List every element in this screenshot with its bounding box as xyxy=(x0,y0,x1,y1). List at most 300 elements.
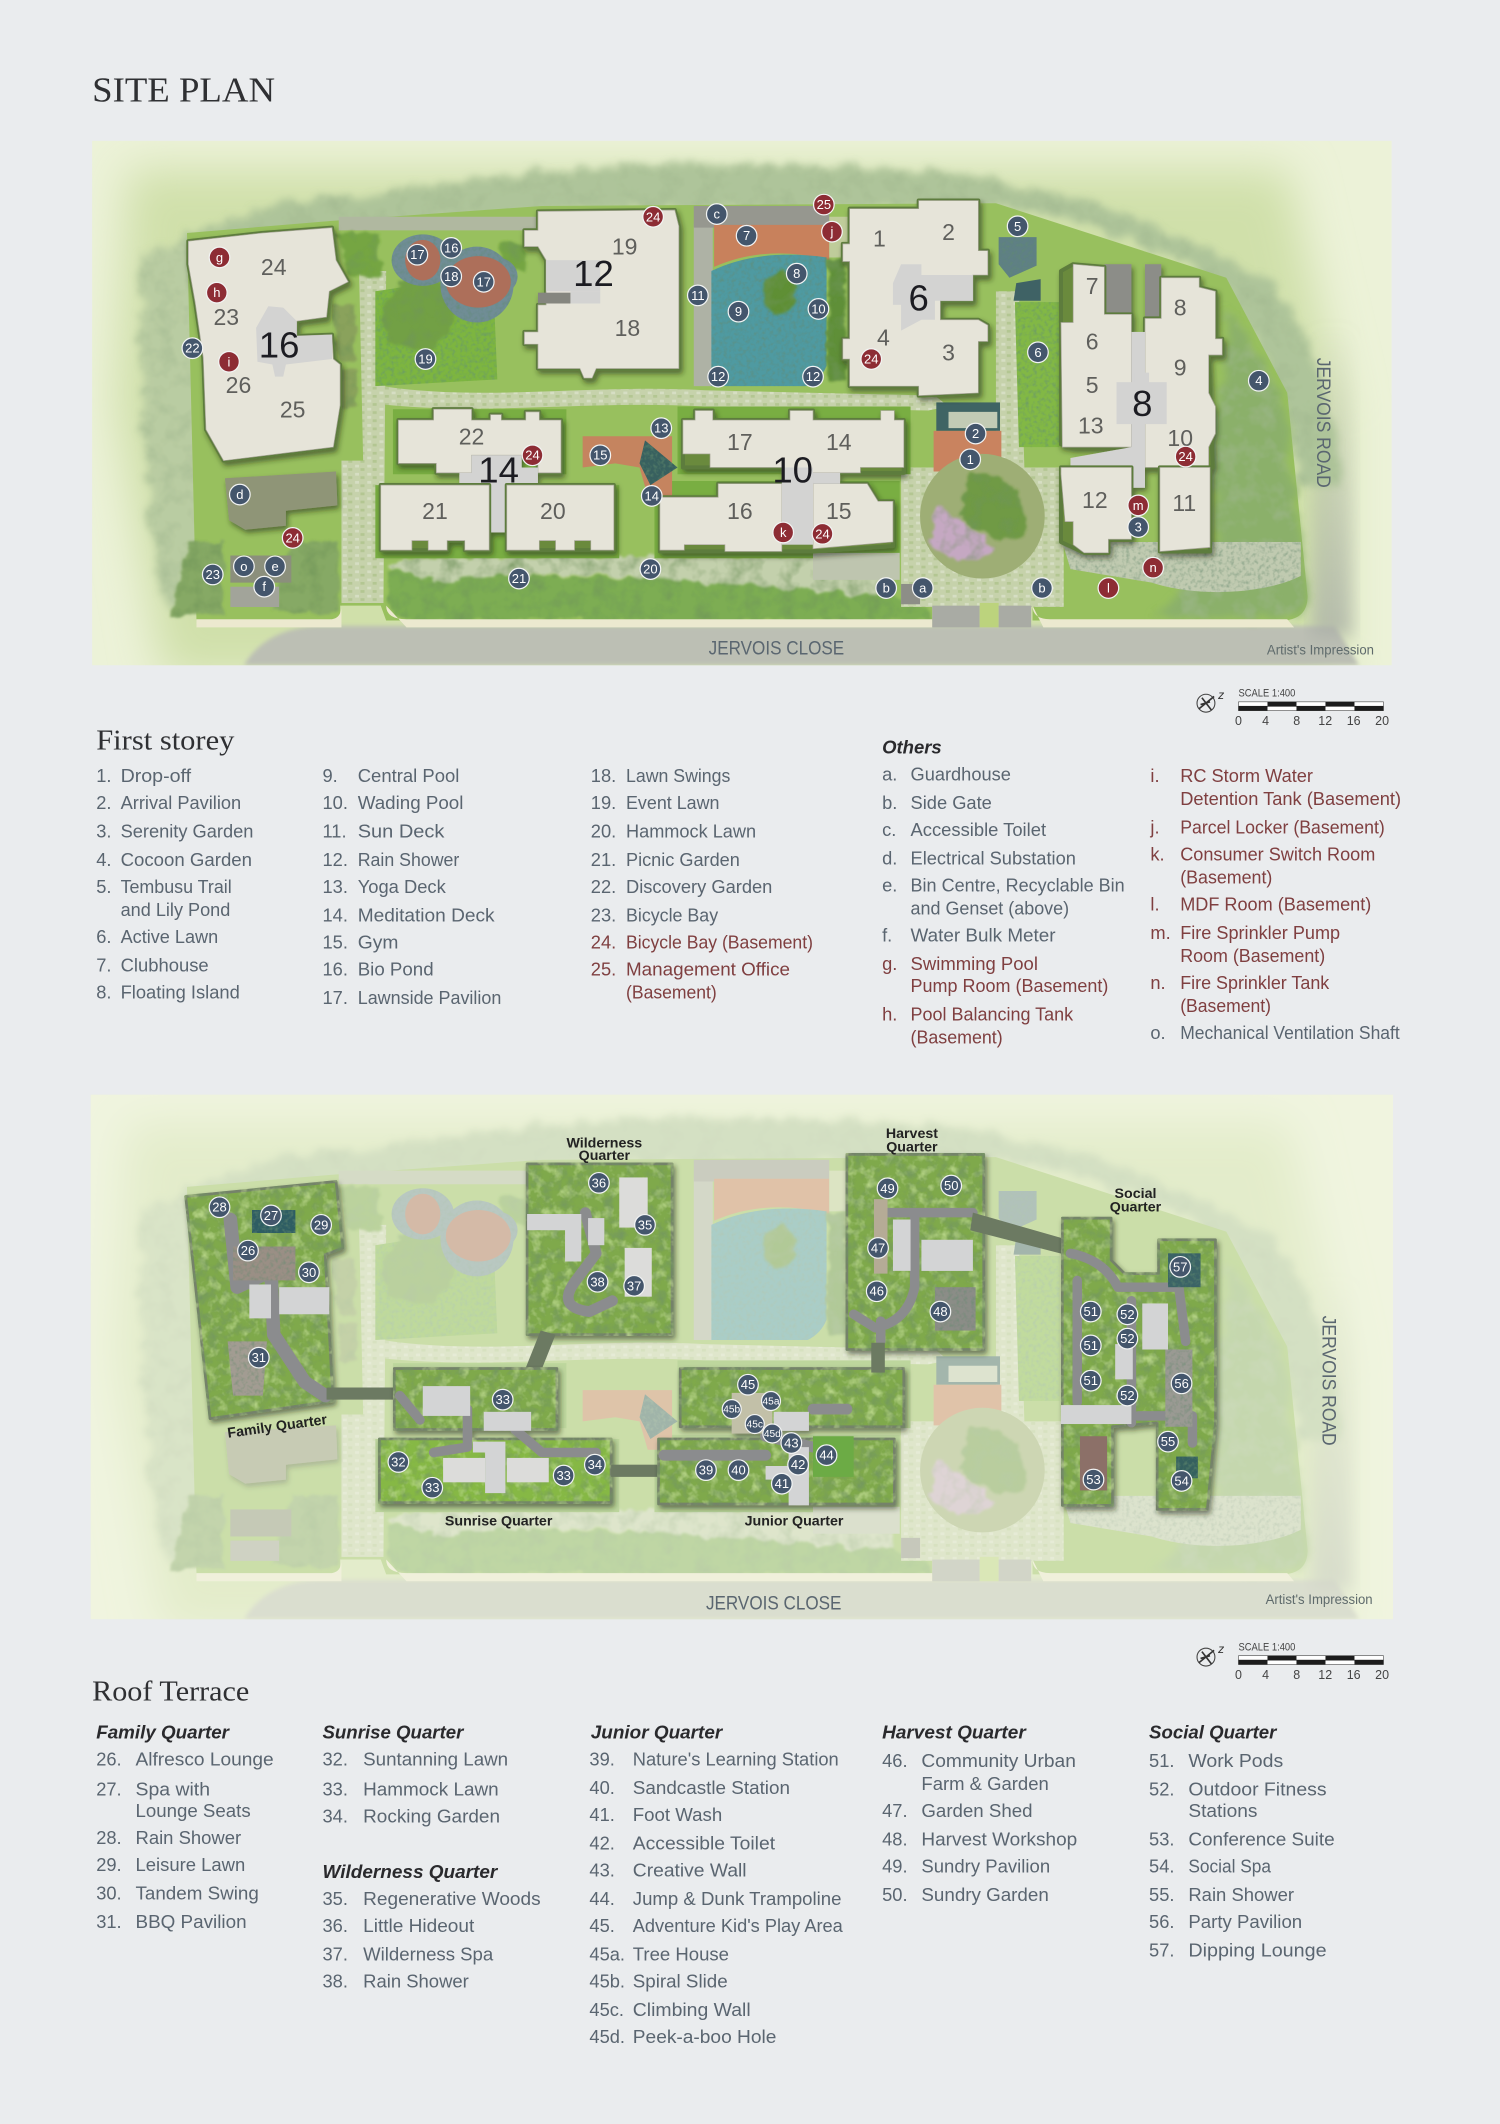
legend column: 9 to 17: 12. xyxy=(322,849,348,870)
roof garden: Junior Quarter xyxy=(659,1368,904,1505)
markers: first storey facilities: i xyxy=(228,354,231,369)
block 8: 5 xyxy=(1086,372,1099,398)
legend column: 18 to 25: 22. xyxy=(591,876,616,897)
legend column: others a to h: and Genset (above) xyxy=(911,898,1069,919)
legend: Harvest Quarter: 47. xyxy=(882,1800,908,1821)
bridge: Sunrise to Junior xyxy=(611,1465,660,1477)
block 8: 12 xyxy=(1082,487,1108,513)
markers: roof terrace facilities: 51 xyxy=(1084,1373,1098,1388)
legend: Harvest Quarter: Farm & Garden xyxy=(921,1773,1049,1794)
quarter name labels: Harvest xyxy=(886,1126,938,1142)
legend: Harvest Quarter: Sundry Pavilion xyxy=(921,1856,1050,1877)
legend: Family Quarter: Tandem Swing xyxy=(136,1883,259,1904)
legend: Junior Quarter: Sandcastle Station xyxy=(633,1777,790,1798)
markers: first storey facilities: g xyxy=(216,250,223,265)
markers: roof terrace facilities: 52 xyxy=(1120,1388,1135,1403)
block 8: 8 xyxy=(1132,383,1152,424)
legend column: 9 to 17: 13. xyxy=(322,876,348,897)
legend column: 18 to 25: 20. xyxy=(591,820,616,841)
block 10: 10 xyxy=(772,449,813,490)
legend column: 18 to 25: 23. xyxy=(591,904,616,925)
legend: Family Quarter: Spa with xyxy=(136,1778,210,1799)
markers: first storey facilities: 13 xyxy=(654,421,668,436)
legend column: 1 to 8: 8. xyxy=(96,982,111,1003)
legend column: 18 to 25: Bicycle Bay xyxy=(626,904,719,925)
markers: first storey facilities: 23 xyxy=(206,567,220,582)
markers: first storey facilities: 24 xyxy=(646,209,660,224)
legend column: 1 to 8: and Lily Pond xyxy=(121,899,230,920)
legend: Junior Quarter: 45d. xyxy=(589,2026,625,2047)
legend: Junior Quarter: 45c. xyxy=(589,1999,624,2020)
legend column: 9 to 17: 10. xyxy=(322,792,348,813)
legend: Family Quarter: Lounge Seats xyxy=(136,1800,251,1821)
legend column: 9 to 17: 9. xyxy=(322,765,338,786)
markers: roof terrace facilities: 48 xyxy=(933,1304,948,1319)
scale bar: roof terrace: 4 xyxy=(1262,1668,1269,1682)
legend column: 1 to 8: Serenity Garden xyxy=(121,820,253,841)
legend column: others i to o: j. xyxy=(1149,816,1160,837)
heading: First storey: First storey xyxy=(96,725,235,756)
legend column: others a to h: Pool Balancing Tank xyxy=(911,1003,1074,1024)
markers: first storey facilities: 24 xyxy=(815,526,830,541)
landscape base xyxy=(81,135,1409,677)
legend: Junior Quarter: Jump & Dunk Trampoline xyxy=(633,1888,841,1909)
quarter name labels: Sunrise Quarter xyxy=(445,1514,553,1530)
legend column: others i to o: Mechanical Ventilation Shaft xyxy=(1180,1022,1400,1043)
legend: Family Quarter: 31. xyxy=(96,1911,122,1932)
block 16: 26 xyxy=(226,372,251,398)
markers: roof terrace facilities: 40 xyxy=(731,1463,746,1478)
block 8: 10 xyxy=(1167,425,1193,451)
markers: first storey facilities: 3 xyxy=(1135,520,1142,535)
block 12: 12 xyxy=(573,253,614,294)
markers: roof terrace facilities: 57 xyxy=(1173,1259,1187,1274)
legend: Social Quarter: Dipping Lounge xyxy=(1188,1940,1327,1961)
legend column: 18 to 25: Hammock Lawn xyxy=(626,820,756,841)
markers: first storey facilities: 24 xyxy=(525,448,540,463)
legend: Family Quarter: Rain Shower xyxy=(136,1827,241,1848)
quarter name labels: Quarter xyxy=(1110,1199,1162,1215)
markers: first storey facilities: o xyxy=(240,559,248,574)
markers: first storey facilities: 9 xyxy=(735,304,742,319)
legend column: others i to o: l. xyxy=(1150,894,1160,915)
legend column: 18 to 25: Lawn Swings xyxy=(626,765,730,786)
legend: Social Quarter: 52. xyxy=(1149,1778,1174,1799)
legend column: 1 to 8: 3. xyxy=(96,820,111,841)
markers: roof terrace facilities: 41 xyxy=(775,1476,789,1491)
markers: roof terrace facilities: 34 xyxy=(588,1457,602,1472)
legend: Sunrise Quarter: Rocking Garden xyxy=(363,1805,500,1826)
legend: Sunrise Quarter: Hammock Lawn xyxy=(363,1778,499,1799)
legend: Family Quarter: Leisure Lawn xyxy=(136,1854,245,1875)
legend: Sunrise Quarter: 32. xyxy=(322,1748,348,1769)
legend column: 1 to 8: Floating Island xyxy=(121,982,240,1003)
markers: roof terrace facilities: 36 xyxy=(592,1175,606,1190)
legend column: 9 to 17: Central Pool xyxy=(358,765,459,786)
markers: first storey facilities: 21 xyxy=(512,571,526,586)
markers: first storey facilities: 14 xyxy=(645,488,659,503)
legend column: 1 to 8: 2. xyxy=(96,792,111,813)
legend column: 9 to 17: Sun Deck xyxy=(358,820,445,841)
markers: roof terrace facilities: 45a xyxy=(763,1397,780,1408)
legend column: 1 to 8: Arrival Pavilion xyxy=(121,792,241,813)
markers: roof terrace facilities: 47 xyxy=(871,1240,885,1255)
legend column: others i to o: i. xyxy=(1150,765,1160,786)
buildings: first storey blocks xyxy=(188,201,1222,553)
block 6: 1 xyxy=(873,226,886,252)
legend: Harvest Quarter: Community Urban xyxy=(921,1750,1076,1771)
legend column: others a to h: h. xyxy=(882,1003,897,1024)
quarter name labels xyxy=(226,1126,1162,1530)
landscape base, faded xyxy=(81,1084,1409,1631)
legend column: 9 to 17: Rain Shower xyxy=(358,849,459,870)
note: artist's impression: Artist's Impression xyxy=(1266,1592,1373,1607)
legend column: others a to h: Water Bulk Meter xyxy=(911,925,1056,946)
legend: Wilderness Quarter xyxy=(322,1861,541,1992)
legend column: 18 to 25: 18. xyxy=(591,765,616,786)
block 8: 9 xyxy=(1174,354,1187,380)
block 16 xyxy=(188,228,348,461)
markers: first storey facilities: c xyxy=(714,207,721,222)
legend: Social Quarter: 54. xyxy=(1149,1856,1174,1877)
bridge: Harvest to Junior xyxy=(871,1343,885,1373)
legend column: 9 to 17: Wading Pool xyxy=(358,792,463,813)
markers: roof terrace facilities: 45 xyxy=(741,1377,755,1392)
legend column: others i to o: m. xyxy=(1150,922,1171,943)
legend: Junior Quarter: Tree House xyxy=(633,1944,729,1965)
legend column: 1 to 8 xyxy=(96,765,253,1003)
legend column: 1 to 8: Drop-off xyxy=(121,765,192,786)
block 14 xyxy=(381,409,614,550)
markers: first storey facilities: 19 xyxy=(418,352,433,367)
legend: Social Quarter: Social Quarter xyxy=(1149,1721,1277,1742)
block 14: 14 xyxy=(478,449,519,490)
markers: first storey facilities: 17 xyxy=(477,274,491,289)
legend: Wilderness Quarter: 37. xyxy=(322,1944,348,1965)
legend: Junior Quarter: Adventure Kid's Play Area xyxy=(633,1915,844,1936)
legend column: others i to o: (Basement) xyxy=(1180,995,1271,1016)
block 12: 19 xyxy=(612,234,637,260)
legend: Social Quarter: 55. xyxy=(1149,1884,1174,1905)
markers: roof terrace facilities: 30 xyxy=(302,1265,316,1280)
legend column: 9 to 17 xyxy=(322,765,501,1008)
markers: roof terrace facilities: 33 xyxy=(495,1392,510,1407)
legend column: 9 to 17: 17. xyxy=(322,987,348,1008)
block 6 xyxy=(843,201,988,396)
legend: Social Quarter: Rain Shower xyxy=(1188,1884,1294,1905)
block 6: 2 xyxy=(942,219,955,245)
quarter name labels: Family Quarter xyxy=(226,1412,328,1442)
legend: Wilderness Quarter: 38. xyxy=(322,1971,348,1992)
markers: first storey facilities: 4 xyxy=(1255,373,1262,388)
markers: roof terrace facilities: 56 xyxy=(1174,1376,1189,1391)
markers: roof terrace facilities: 54 xyxy=(1174,1473,1189,1488)
legend column: others a to h: c. xyxy=(882,819,896,840)
legend column: 1 to 8: 5. xyxy=(96,876,111,897)
block 6: 3 xyxy=(942,339,955,365)
markers: roof terrace facilities: 55 xyxy=(1161,1434,1175,1449)
road label: Jervois Close: JERVOIS CLOSE xyxy=(706,1593,841,1615)
title: SITE PLAN xyxy=(92,71,275,110)
block 10 xyxy=(660,411,904,551)
block 14: 20 xyxy=(540,498,566,524)
markers: first storey facilities: k xyxy=(780,525,787,540)
legend column: others i to o: (Basement) xyxy=(1180,866,1272,887)
legend: Family Quarter: 27. xyxy=(96,1778,122,1799)
note: artist's impression: Artist's Impression xyxy=(1267,642,1374,657)
markers: first storey facilities: 12 xyxy=(711,369,725,384)
legend: Social Quarter: 56. xyxy=(1149,1911,1174,1932)
markers: first storey facilities: 15 xyxy=(593,448,608,463)
legend column: others a to h: d. xyxy=(882,847,897,868)
legend: Family Quarter: 28. xyxy=(96,1827,122,1848)
legend column: others a to h: Guardhouse xyxy=(911,763,1011,784)
legend: Family Quarter: 29. xyxy=(96,1854,122,1875)
scale bar: first storey: z xyxy=(1217,688,1224,702)
markers: first storey facilities: 22 xyxy=(185,341,200,356)
legend column: others a to h: Bin Centre, Recyclable Bin xyxy=(911,875,1125,896)
markers: first storey facilities: 17 xyxy=(410,247,425,262)
roof garden: Family Quarter xyxy=(186,1182,343,1419)
legend: Wilderness Quarter: Regenerative Woods xyxy=(363,1888,541,1909)
markers: first storey facilities: 24 xyxy=(864,352,879,367)
legend column: 9 to 17: Lawnside Pavilion xyxy=(358,987,501,1008)
scale bar: first storey: 16 xyxy=(1347,714,1361,728)
legend column: others a to h: Pump Room (Basement) xyxy=(911,975,1108,996)
legend column: others a to h: (Basement) xyxy=(911,1026,1003,1047)
markers: roof terrace facilities: 32 xyxy=(391,1454,406,1469)
road label: Jervois Close: JERVOIS CLOSE xyxy=(709,637,844,659)
legend: Family Quarter: BBQ Pavilion xyxy=(136,1911,247,1932)
markers: roof terrace facilities: 50 xyxy=(944,1178,958,1193)
markers: first storey facilities: a xyxy=(919,581,927,596)
markers: first storey facilities: b xyxy=(883,581,890,596)
legend: Junior Quarter: 45. xyxy=(589,1915,615,1936)
block 14: 22 xyxy=(459,423,484,449)
legend column: 18 to 25: Management Office xyxy=(626,959,790,980)
legend: Wilderness Quarter: Wilderness Quarter xyxy=(322,1861,498,1882)
legend column: others a to h: g. xyxy=(882,953,897,974)
legend column: 1 to 8: 1. xyxy=(96,765,111,786)
block 10: 16 xyxy=(727,498,753,524)
legend column: 1 to 8: Cocoon Garden xyxy=(121,849,252,870)
legend: Junior Quarter: Junior Quarter xyxy=(591,1721,723,1742)
markers: roof terrace facilities: 49 xyxy=(880,1181,895,1196)
legend column: others a to h: a. xyxy=(882,763,897,784)
block 6: 6 xyxy=(909,277,929,318)
markers: roof terrace facilities: 26 xyxy=(241,1243,255,1258)
legend: Sunrise Quarter: 33. xyxy=(322,1778,348,1799)
bridge: Family to Sunrise xyxy=(327,1387,394,1400)
legend: Social Quarter: Conference Suite xyxy=(1188,1828,1335,1849)
legend column: 1 to 8: 6. xyxy=(96,926,111,947)
legend column: 1 to 8: 4. xyxy=(96,849,111,870)
markers: roof terrace facilities: 52 xyxy=(1120,1307,1135,1322)
markers: roof terrace facilities: 45c xyxy=(747,1420,763,1431)
legend: Junior Quarter: 45a. xyxy=(589,1944,625,1965)
legend: Junior Quarter: Creative Wall xyxy=(633,1860,747,1881)
markers: roof terrace facilities: 35 xyxy=(638,1217,652,1232)
markers: first storey facilities: 10 xyxy=(811,301,826,316)
legend: Harvest Quarter: Harvest Quarter xyxy=(882,1721,1027,1742)
legend column: 9 to 17: Meditation Deck xyxy=(358,904,495,925)
bridge: Harvest to Social xyxy=(970,1213,1077,1256)
scale bar: first storey xyxy=(1197,687,1389,728)
legend column: others i to o: MDF Room (Basement) xyxy=(1180,894,1371,915)
markers: roof terrace facilities: 31 xyxy=(252,1350,266,1365)
legend: Social Quarter xyxy=(1149,1721,1335,1961)
scale bar: first storey: 8 xyxy=(1293,714,1300,728)
block 16: 24 xyxy=(261,254,287,280)
block 10: 15 xyxy=(826,498,852,524)
markers: first storey facilities: e xyxy=(271,559,279,574)
block 16: 25 xyxy=(280,396,305,422)
legend column: others i to o: n. xyxy=(1150,972,1166,993)
block 8: 13 xyxy=(1078,413,1104,439)
legend column: others i to o: k. xyxy=(1150,843,1165,864)
road label: Jervois Road: JERVOIS ROAD xyxy=(1317,1316,1339,1446)
markers: first storey facilities: l xyxy=(1107,581,1110,596)
legend: Wilderness Quarter: Wilderness Spa xyxy=(363,1944,494,1965)
legend: Junior Quarter: 39. xyxy=(589,1748,615,1769)
legend: Harvest Quarter: 50. xyxy=(882,1884,908,1905)
legend: Junior Quarter: 41. xyxy=(589,1804,615,1825)
markers: first storey facilities: 6 xyxy=(1034,345,1042,360)
legend: Social Quarter: Stations xyxy=(1188,1800,1257,1821)
legend column: others i to o: Detention Tank (Basement) xyxy=(1180,788,1401,809)
markers: first storey facilities xyxy=(182,194,1269,598)
legend: Junior Quarter: 43. xyxy=(589,1860,615,1881)
legend: Harvest Quarter: Sundry Garden xyxy=(921,1884,1049,1905)
legend column: 1 to 8: Tembusu Trail xyxy=(121,876,232,897)
markers: roof terrace facilities: 39 xyxy=(699,1463,713,1478)
block 6: 4 xyxy=(877,325,890,351)
legend column: 18 to 25: (Basement) xyxy=(626,982,717,1003)
markers: roof terrace facilities: 38 xyxy=(590,1274,605,1289)
legend column: others i to o: Parcel Locker (Basement) xyxy=(1180,816,1385,837)
legend column: others i to o: Fire Sprinkler Tank xyxy=(1180,972,1330,993)
markers: roof terrace facilities: 44 xyxy=(819,1448,834,1463)
markers: roof terrace facilities xyxy=(209,1173,1192,1498)
legend: Junior Quarter: Accessible Toilet xyxy=(633,1832,775,1853)
legend column: others a to h xyxy=(882,763,1125,1047)
markers: first storey facilities: 18 xyxy=(444,269,458,284)
block 10: 17 xyxy=(727,429,753,455)
markers: roof terrace facilities: 51 xyxy=(1084,1304,1098,1319)
block 16: 16 xyxy=(259,325,299,366)
markers: roof terrace facilities: 51 xyxy=(1084,1338,1098,1353)
block 8: 8 xyxy=(1174,295,1187,321)
legend: Harvest Quarter xyxy=(882,1721,1077,1905)
legend column: others a to h: Accessible Toilet xyxy=(911,819,1046,840)
legend: Wilderness Quarter: 36. xyxy=(322,1915,348,1936)
legend: Social Quarter: Work Pods xyxy=(1188,1750,1283,1771)
legend column: 9 to 17: 11. xyxy=(322,820,347,841)
markers: first storey facilities: j xyxy=(830,224,834,239)
scale bar: roof terrace: 20 xyxy=(1375,1668,1389,1682)
markers: first storey facilities: 1 xyxy=(967,452,974,467)
legend column: others i to o: Consumer Switch Room xyxy=(1180,843,1375,864)
legend: Junior Quarter: 40. xyxy=(589,1777,615,1798)
block 8 xyxy=(1061,264,1222,553)
markers: first storey facilities: 25 xyxy=(817,197,831,212)
legend column: others a to h: e. xyxy=(882,875,897,896)
legend column: 18 to 25 xyxy=(591,765,813,1003)
legend: Sunrise Quarter: Suntanning Lawn xyxy=(363,1748,508,1769)
scale bar: first storey: SCALE 1:400 xyxy=(1238,687,1295,699)
legend column: 18 to 25: 25. xyxy=(591,959,616,980)
markers: roof terrace facilities: 43 xyxy=(784,1435,799,1450)
markers: first storey facilities: 20 xyxy=(643,562,658,577)
markers: roof terrace facilities: 53 xyxy=(1086,1472,1101,1487)
legend column: others a to h: f. xyxy=(882,925,892,946)
markers: roof terrace facilities: 52 xyxy=(1120,1331,1135,1346)
legend column: 1 to 8: 7. xyxy=(96,954,111,975)
scale bar: roof terrace xyxy=(1197,1641,1389,1682)
markers: roof terrace facilities: 46 xyxy=(869,1284,884,1299)
legend column: 9 to 17: 16. xyxy=(322,959,348,980)
bridge: Sunrise to Wilderness xyxy=(526,1330,556,1368)
legend column: 18 to 25: Bicycle Bay (Basement) xyxy=(626,931,813,952)
legend: Sunrise Quarter: Sunrise Quarter xyxy=(322,1721,464,1742)
block 14: 21 xyxy=(422,498,448,524)
legend heading: Others: Others xyxy=(882,736,942,757)
roof garden: Wilderness Quarter xyxy=(527,1164,672,1335)
heading: Roof Terrace: Roof Terrace xyxy=(92,1676,249,1707)
block 12 xyxy=(524,210,679,378)
scale bar: first storey: 0 xyxy=(1235,714,1242,728)
legend: Harvest Quarter: Harvest Workshop xyxy=(921,1828,1077,1849)
legend: Social Quarter: 53. xyxy=(1149,1828,1174,1849)
legend: Family Quarter: Family Quarter xyxy=(96,1721,230,1742)
legend column: 18 to 25: Event Lawn xyxy=(626,792,720,813)
markers: first storey facilities: h xyxy=(213,285,220,300)
markers: roof terrace facilities: 29 xyxy=(314,1217,328,1232)
legend: Family Quarter: 30. xyxy=(96,1883,122,1904)
roof garden: Social Quarter xyxy=(1061,1218,1215,1509)
legend: Family Quarter: 26. xyxy=(96,1748,122,1769)
legend: Social Quarter: Social Spa xyxy=(1188,1856,1272,1877)
legend: Wilderness Quarter: 35. xyxy=(322,1888,348,1909)
legend: Harvest Quarter: 48. xyxy=(882,1828,908,1849)
markers: roof terrace facilities: 33 xyxy=(556,1468,571,1483)
scale bar: first storey: 12 xyxy=(1318,714,1332,728)
road label: Jervois Road: JERVOIS ROAD xyxy=(1312,358,1334,488)
scale bar: roof terrace: 8 xyxy=(1293,1668,1300,1682)
legend: Wilderness Quarter: Rain Shower xyxy=(363,1971,469,1992)
markers: first storey facilities: 11 xyxy=(691,288,705,303)
legend column: others i to o xyxy=(1149,765,1401,1043)
legend column: 9 to 17: Yoga Deck xyxy=(358,876,447,897)
legend column: others i to o: o. xyxy=(1150,1022,1166,1043)
legend column: 9 to 17: 14. xyxy=(322,904,348,925)
legend: Junior Quarter: Peek-a-boo Hole xyxy=(633,2026,776,2047)
quarter name labels: Wilderness xyxy=(566,1136,642,1152)
markers: first storey facilities: 24 xyxy=(285,530,300,545)
legend column: 9 to 17: Bio Pond xyxy=(358,959,434,980)
markers: roof terrace facilities: 27 xyxy=(264,1208,278,1223)
legend: Wilderness Quarter: Little Hideout xyxy=(363,1915,474,1936)
quarter name labels: Junior Quarter xyxy=(745,1514,844,1530)
legend column: 18 to 25: 24. xyxy=(591,931,616,952)
legend column: 1 to 8: Clubhouse xyxy=(121,954,209,975)
scale bar: roof terrace: z xyxy=(1217,1642,1224,1656)
legend: Social Quarter: Outdoor Fitness xyxy=(1188,1778,1327,1799)
markers: roof terrace facilities: 28 xyxy=(212,1200,227,1215)
legend: Social Quarter: 51. xyxy=(1149,1750,1174,1771)
legend column: others a to h: Swimming Pool xyxy=(911,953,1038,974)
scale bar: roof terrace: 16 xyxy=(1347,1668,1361,1682)
